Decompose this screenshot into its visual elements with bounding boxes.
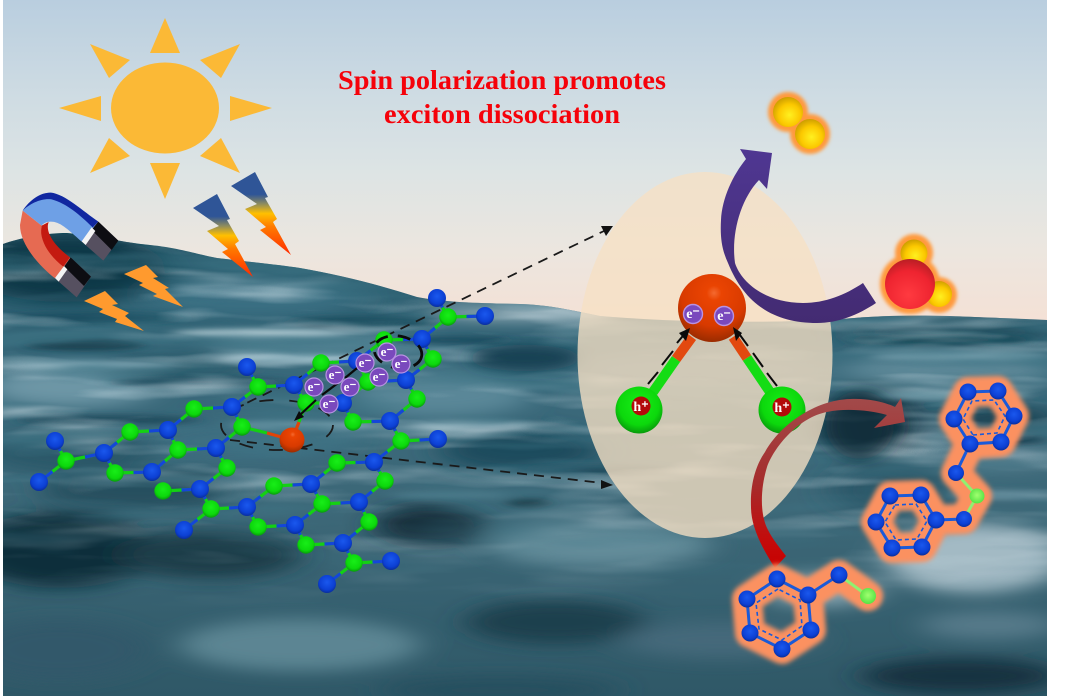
electrons and holes: h⁺ xyxy=(633,400,649,415)
semi-transparent highlight ellipse xyxy=(578,172,832,538)
electrons on sheet: e⁻ xyxy=(329,367,341,382)
dashed charge arrows xyxy=(648,331,777,386)
electrons on sheet: e⁻ xyxy=(395,356,407,371)
dashed electron transfer arrows xyxy=(301,332,424,414)
electrons on sheet: e⁻ xyxy=(373,369,385,384)
arrowheads of zoom lines xyxy=(601,226,613,489)
orange atom xyxy=(678,274,746,342)
electrons on sheet: e⁻ xyxy=(381,344,393,359)
title: exciton dissociation xyxy=(384,98,620,129)
bonds of central molecule xyxy=(653,337,770,392)
electrons on sheet xyxy=(305,343,410,413)
molecule: hydrogen product xyxy=(768,92,830,154)
electrons on sheet: e⁻ xyxy=(344,379,356,394)
icon: sun xyxy=(59,18,272,199)
icon: gradient lightning bolts xyxy=(193,172,291,277)
electrons and holes: e⁻ xyxy=(717,309,731,324)
electrons on sheet: e⁻ xyxy=(308,379,320,394)
electrons and holes: e⁻ xyxy=(686,307,700,322)
purple curved arrow xyxy=(721,149,876,323)
molecule: water xyxy=(880,234,957,314)
electrons and holes: h⁺ xyxy=(774,401,790,416)
electrons and holes xyxy=(632,304,792,416)
red curved arrow xyxy=(751,398,905,568)
carbon nitride sheet molecule xyxy=(30,289,494,593)
icon: horseshoe magnet xyxy=(20,193,118,297)
electrons on sheet: e⁻ xyxy=(323,396,335,411)
icon: orange sparks xyxy=(84,265,183,331)
arrowhead to single atom xyxy=(294,411,304,421)
molecule: benzyl reactant xyxy=(738,566,876,658)
title: Spin polarization promotes xyxy=(338,64,666,95)
arrowheads xyxy=(679,327,742,341)
molecule: coupled product xyxy=(868,382,1022,556)
electrons on sheet: e⁻ xyxy=(359,355,371,370)
left green atom xyxy=(616,386,662,434)
central active-site molecule xyxy=(616,274,806,434)
title xyxy=(338,64,666,129)
diagram: dashed zoom lines xyxy=(221,231,604,483)
right green atom xyxy=(758,386,806,434)
